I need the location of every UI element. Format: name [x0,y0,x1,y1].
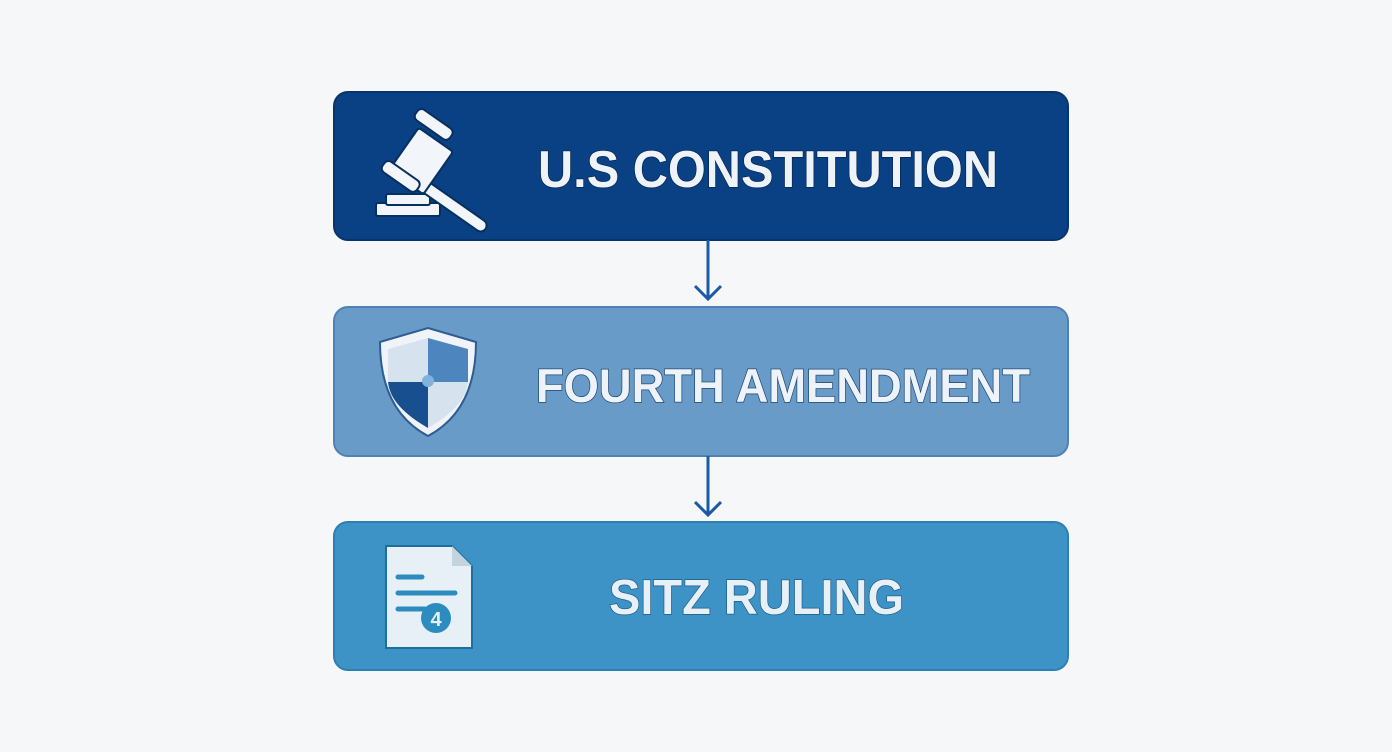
panel: U.S Constitution [334,92,1068,240]
panel: Sitz Ruling [334,522,1068,670]
arrow 2 [695,456,721,515]
icon: document: 4 [430,609,442,631]
icon: gavel [376,107,489,234]
icon: shield [380,328,476,436]
heading: FOURTH AMENDMENT: FOURTH AMENDMENT [536,359,1030,412]
icon: document [386,546,472,648]
heading: SITZ RULING: SITZ RULING [609,571,904,625]
heading: U.S CONSTITUTION: U.S CONSTITUTION [538,141,998,199]
panel: Fourth Amendment [334,307,1068,456]
arrow 1 [695,240,721,299]
